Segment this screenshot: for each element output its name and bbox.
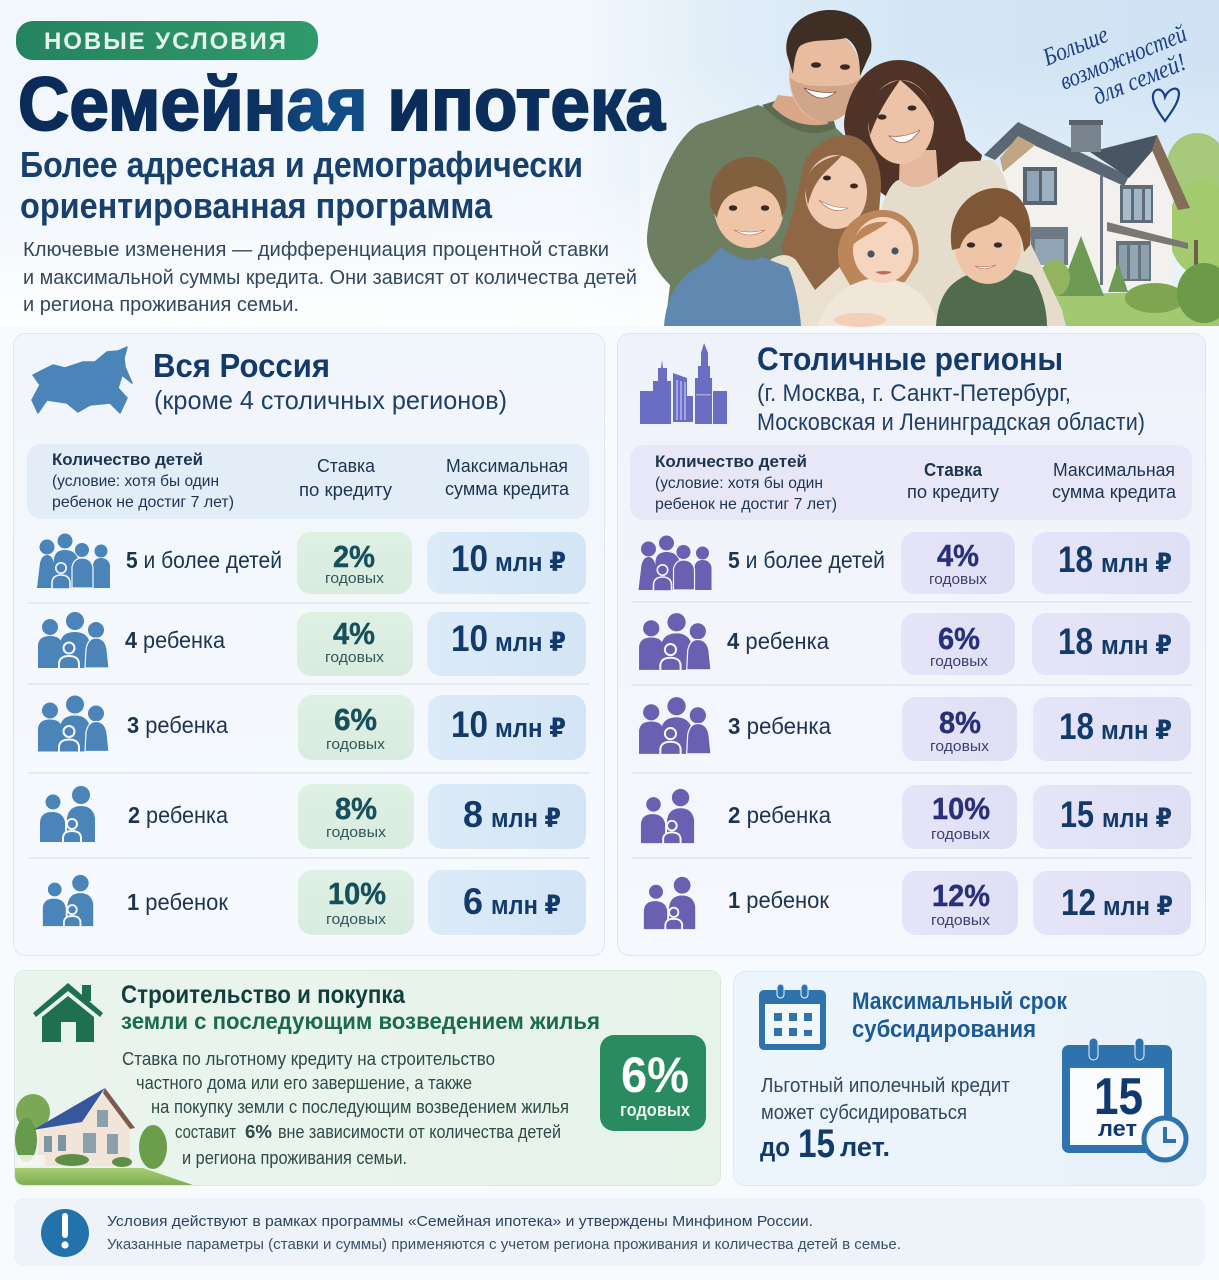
- body text: [760, 1074, 1011, 1166]
- row: 3 ребенка: 10: [451, 704, 488, 745]
- body text: составит: [175, 1122, 236, 1142]
- row: 5 и более детей: [37, 532, 586, 594]
- panel heading: Столичные регионы: [757, 341, 1063, 377]
- table header: Максимальная: [1053, 460, 1175, 480]
- badge: 6% годовых: [600, 1035, 706, 1131]
- body text: до: [760, 1132, 790, 1162]
- house: [984, 120, 1219, 292]
- row: 5 и более детей: 5 и более детей: [126, 547, 282, 573]
- hero photo: family in front of house: [647, 10, 1219, 327]
- title: Семейная ипотека: [18, 62, 666, 146]
- hero sky background: [0, 0, 1219, 326]
- body text: Льготный иполечный кредит: [761, 1074, 1011, 1097]
- body text: лет.: [840, 1132, 890, 1162]
- row: 5 и более детей: 18: [1058, 539, 1093, 580]
- row: 4 ребенка: [38, 612, 586, 676]
- heading: [852, 988, 1068, 1043]
- row: 3 ребенка: 6%: [334, 702, 377, 737]
- row: 2 ребенка: 15: [1060, 794, 1094, 835]
- row: 4 ребенка: млн ₽: [1101, 630, 1172, 660]
- badge: 6% годовых: 6%: [621, 1047, 689, 1103]
- heading: земли с последующим возведением жилья: [121, 1008, 600, 1034]
- row: 4 ребенка: 4 ребенка: [125, 627, 225, 653]
- row: 3 ребенка: 3 ребенка: [728, 713, 831, 739]
- row: 1 ребенок: годовых: [326, 912, 387, 928]
- baby: [818, 210, 938, 327]
- panel: срок субсидирования: [734, 972, 1206, 1186]
- panel heading: Московская и Ленинградская области): [757, 409, 1145, 436]
- intro text: и максимальной суммы кредита. Они зависят от количества детей: [23, 266, 637, 289]
- heading: субсидирования: [852, 1016, 1036, 1043]
- icon: heart: [1153, 89, 1179, 121]
- row: 1 ребенок: 6: [463, 881, 483, 922]
- note text: Условия действуют в рамках программы «Семейная ипотека» и утверждены Минфином России.: [107, 1213, 813, 1230]
- intro text: и региона проживания семьи.: [23, 293, 299, 316]
- row: 1 ребенок: 1 ребенок: [728, 887, 830, 913]
- footer note: [14, 1198, 1205, 1266]
- row: 3 ребенка: годовых: [930, 739, 990, 755]
- body text: может субсидироваться: [761, 1101, 967, 1124]
- subtitle: [20, 144, 583, 226]
- body text: Ставка по льготному кредиту на строительство: [122, 1049, 495, 1069]
- table header: [27, 444, 589, 519]
- icon: calendar 15 лет with clock: лет: [1098, 1116, 1137, 1141]
- subtitle: Более адресная и демографически: [20, 144, 583, 185]
- badge: 6% годовых: годовых: [620, 1100, 690, 1120]
- intro text: [23, 238, 637, 316]
- icon: map of Russia: [32, 347, 132, 413]
- table header: Ставка: [924, 460, 983, 480]
- panel: Вся Россия: [14, 334, 604, 956]
- row: 5 и более детей: млн ₽: [495, 547, 566, 577]
- table header: сумма кредита: [445, 479, 570, 499]
- handwritten slogan: [1038, 20, 1191, 111]
- icon: calendar 15 лет with clock: [1062, 1038, 1186, 1160]
- panel heading: [757, 341, 1145, 436]
- note text: Указанные параметры (ставки и суммы) применяются с учетом региона проживания и количества детей в семье.: [107, 1237, 901, 1253]
- girl: [770, 135, 885, 326]
- boy in green hoodie: [936, 188, 1047, 326]
- badge: new conditions: [16, 21, 318, 60]
- row: 3 ребенка: млн ₽: [1101, 715, 1172, 745]
- row: 5 и более детей: 4%: [937, 538, 979, 573]
- illustration: country house: [15, 1088, 193, 1185]
- row: 4 ребенка: 6%: [938, 621, 980, 656]
- table header: Максимальная: [446, 456, 568, 476]
- row: 3 ребенка: [38, 695, 586, 760]
- row: 3 ребенка: млн ₽: [495, 713, 566, 743]
- mother: [844, 60, 1066, 326]
- row: 4 ребенка: 18: [1058, 621, 1093, 662]
- icon: green house: [33, 983, 103, 1042]
- table header: Количество детей: [52, 450, 203, 469]
- row: 2 ребенка: [641, 785, 1191, 849]
- row: 2 ребенка: 8: [463, 794, 483, 835]
- table header: [630, 445, 1192, 520]
- panel heading: [153, 347, 507, 415]
- row: 4 ребенка: 10: [451, 618, 488, 659]
- subtitle: ориентированная программа: [20, 185, 493, 226]
- row: 3 ребенка: [639, 697, 1191, 761]
- row: 1 ребенок: 12%: [932, 878, 990, 913]
- row: 1 ребенок: млн ₽: [491, 890, 561, 920]
- row: 4 ребенка: 4 ребенка: [727, 628, 829, 654]
- icon: exclamation: [41, 1209, 89, 1257]
- row: 5 и более детей: 10: [451, 538, 488, 579]
- row: 4 ребенка: млн ₽: [495, 627, 566, 657]
- icon: city skyline: [640, 343, 727, 424]
- body text: и региона проживания семьи.: [182, 1148, 407, 1168]
- heading: Строительство и покупка: [121, 981, 406, 1009]
- icon: calendar 15 лет with clock: 15: [1094, 1068, 1143, 1126]
- row: 3 ребенка: 3 ребенка: [127, 712, 228, 738]
- panel heading: (г. Москва, г. Санкт-Петербург,: [757, 380, 1071, 407]
- table header: Количество детей: [655, 452, 807, 471]
- body text: 6%: [245, 1122, 272, 1142]
- table header: по кредиту: [299, 480, 392, 500]
- row: 5 и более детей: годовых: [929, 572, 988, 588]
- table header: Ставка: [317, 456, 376, 476]
- row: 3 ребенка: годовых: [326, 737, 386, 753]
- table header: ребенок не достиг 7 лет): [52, 494, 234, 511]
- heading: [121, 981, 600, 1034]
- badge: new conditions: НОВЫЕ УСЛОВИЯ: [44, 28, 286, 55]
- father: [647, 10, 872, 326]
- row: 1 ребенок: 12: [1061, 882, 1096, 923]
- panel: Столичные регионы: [618, 334, 1206, 956]
- row: 5 и более детей: 2%: [333, 539, 375, 574]
- row: 2 ребенка: годовых: [326, 825, 387, 841]
- row: 2 ребенка: 10%: [932, 791, 990, 826]
- row: 1 ребенок: [644, 871, 1191, 935]
- heading: Максимальный срок: [852, 988, 1068, 1015]
- body text: вне зависимости от количества детей: [278, 1122, 561, 1142]
- panel heading: (кроме 4 столичных регионов): [154, 385, 507, 415]
- row: 2 ребенка: 2 ребенка: [128, 802, 228, 828]
- table header: сумма кредита: [1052, 482, 1177, 502]
- table header: (условие: хотя бы один: [52, 473, 219, 490]
- handwritten slogan: для семей!: [1089, 49, 1190, 111]
- body text: [122, 1049, 569, 1168]
- row: 2 ребенка: млн ₽: [1102, 803, 1172, 833]
- row: 4 ребенка: 4%: [333, 616, 375, 651]
- icon: small calendar: [759, 984, 826, 1050]
- row: 2 ребенка: [40, 784, 586, 849]
- panel heading: Вся Россия: [153, 347, 330, 384]
- row: 2 ребенка: млн ₽: [491, 803, 561, 833]
- panel: строительство и покупка земли: [14, 970, 720, 1186]
- row: 4 ребенка: [639, 613, 1190, 675]
- intro text: Ключевые изменения — дифференциация процентной ставки: [23, 238, 609, 261]
- body text: частного дома или его завершение, а также: [136, 1073, 472, 1093]
- row: 3 ребенка: 8%: [939, 705, 981, 740]
- body text: 15: [798, 1122, 835, 1166]
- garden: [1040, 236, 1219, 326]
- table header: ребенок не достиг 7 лет): [655, 496, 837, 513]
- table header: (условие: хотя бы один: [655, 475, 823, 492]
- row: 1 ребенок: млн ₽: [1103, 891, 1173, 921]
- row: 5 и более детей: млн ₽: [1101, 548, 1172, 578]
- note text: [107, 1213, 901, 1253]
- body text: на покупку земли с последующим возведением жилья: [151, 1097, 569, 1117]
- row: 4 ребенка: годовых: [930, 654, 989, 670]
- row: 2 ребенка: годовых: [931, 827, 991, 843]
- handwritten slogan: возможностей: [1056, 20, 1191, 96]
- row: 1 ребенок: [43, 870, 586, 935]
- row: 5 и более детей: годовых: [325, 571, 385, 587]
- handwritten slogan: Больше: [1038, 21, 1112, 72]
- row: 5 и более детей: 5 и более детей: [728, 547, 885, 573]
- row: 5 и более детей: [638, 532, 1190, 594]
- row: 4 ребенка: годовых: [325, 650, 385, 666]
- row: 1 ребенок: годовых: [931, 913, 991, 929]
- boy in blue sweater: [664, 157, 801, 326]
- row: 1 ребенок: 10%: [328, 876, 386, 911]
- table header: по кредиту: [907, 482, 999, 502]
- row: 3 ребенка: 18: [1059, 706, 1094, 747]
- row: 1 ребенок: 1 ребенок: [127, 889, 229, 915]
- row: 2 ребенка: 2 ребенка: [728, 802, 831, 828]
- row: 2 ребенка: 8%: [335, 791, 377, 826]
